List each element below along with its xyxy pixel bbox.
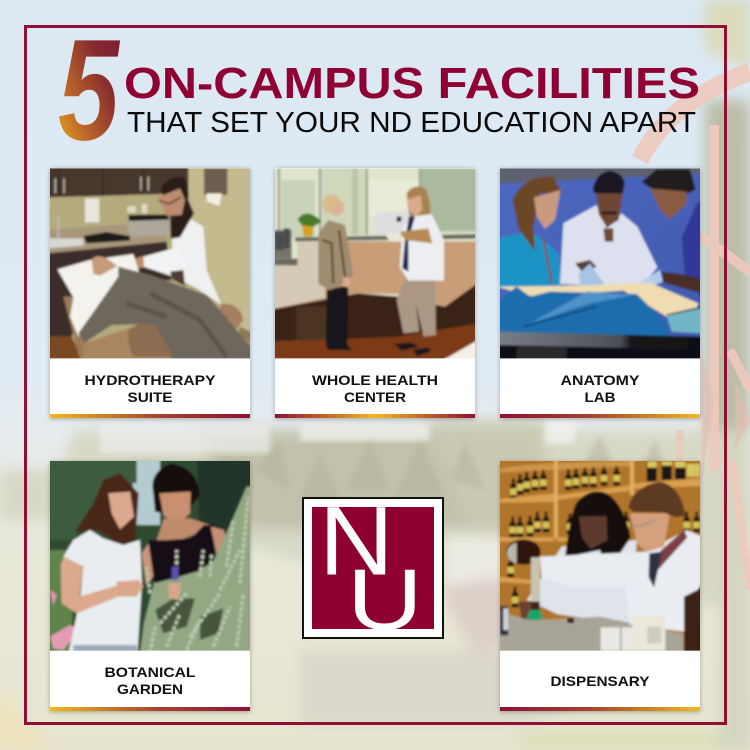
label <box>560 372 640 405</box>
label: SUITE <box>128 389 172 405</box>
label: HYDROTHERAPY <box>84 372 216 388</box>
photo: treatment room <box>47 165 253 363</box>
card: anatomy lab <box>497 165 703 418</box>
gradient bar <box>500 707 700 711</box>
label: ANATOMY <box>560 372 640 388</box>
label: GARDEN <box>117 681 183 697</box>
photo: reception desk <box>272 165 478 362</box>
label <box>312 372 438 405</box>
subheading: THAT SET YOUR ND EDUCATION APART <box>127 107 696 139</box>
photo: two women in garden <box>47 457 253 653</box>
photo: students mixing at shelves <box>497 457 703 653</box>
gradient bar <box>275 414 475 418</box>
card: botanical garden <box>47 457 253 711</box>
big number 5: 5 <box>58 10 120 171</box>
card: hydrotherapy suite <box>47 165 253 418</box>
photo: lab students <box>497 165 703 362</box>
logo letter N: N <box>319 487 394 596</box>
label: DISPENSARY <box>550 673 650 689</box>
card: dispensary <box>497 457 703 711</box>
label <box>104 664 196 697</box>
logo letter U: U <box>347 552 423 648</box>
card: whole health center <box>272 165 478 418</box>
label: LAB <box>584 389 616 405</box>
gradient bar <box>50 707 250 711</box>
logo: NU <box>303 487 443 648</box>
gradient bar <box>50 414 250 418</box>
label: CENTER <box>344 389 406 405</box>
title <box>58 10 700 171</box>
label: WHOLE HEALTH <box>312 372 438 388</box>
label: BOTANICAL <box>104 664 196 680</box>
label <box>84 372 216 405</box>
heading: on-campus facilities: ON-CAMPUS FACILITIES <box>124 60 700 108</box>
gradient bar <box>500 414 700 418</box>
